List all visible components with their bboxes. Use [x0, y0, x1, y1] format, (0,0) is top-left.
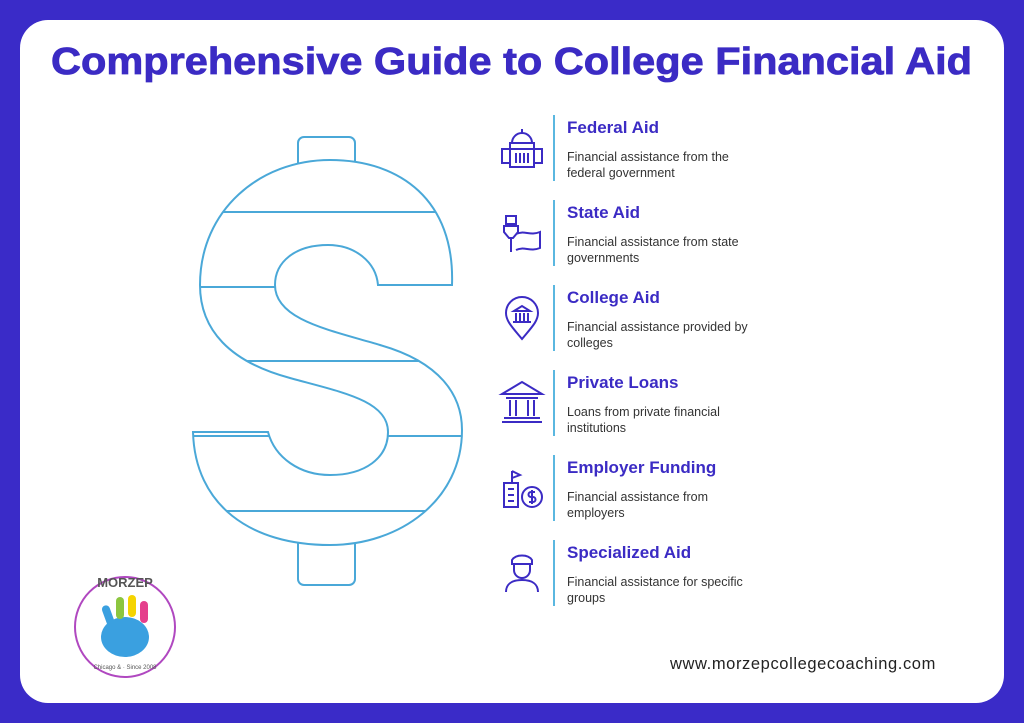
website: www.morzepcollegecoaching.com	[670, 655, 936, 673]
logo	[74, 575, 176, 678]
item: private loans: Loans from private financial institutions	[567, 405, 720, 435]
logo: Chicago & · Since 2008	[93, 665, 157, 671]
item: state aid: State Aid	[567, 203, 640, 222]
icon: building coin	[503, 470, 543, 508]
item: college aid	[505, 285, 748, 351]
icon: capitol	[501, 129, 543, 168]
item: state aid	[503, 200, 739, 266]
item: private loans: Private Loans	[567, 373, 678, 392]
item: employer funding: Employer Funding	[567, 458, 716, 477]
icon: pin bank	[505, 296, 539, 340]
item: state aid: Financial assistance from state governments	[567, 235, 739, 265]
dollar sign	[192, 136, 463, 586]
item: college aid: Financial assistance provided by colleges	[567, 320, 748, 350]
item: employer funding	[503, 455, 716, 521]
item: specialized aid: Specialized Aid	[567, 543, 691, 562]
icon: hand flag	[503, 215, 541, 252]
icon: officer	[505, 554, 539, 592]
item: specialized aid	[505, 540, 743, 606]
item: federal aid	[501, 115, 729, 181]
logo: MORZEP	[97, 575, 153, 590]
icon: bank	[498, 380, 546, 423]
item: employer funding: Financial assistance from employers	[567, 490, 708, 520]
item: private loans	[498, 370, 720, 436]
title: Comprehensive Guide to College Financial Aid	[51, 41, 972, 83]
item: federal aid: Financial assistance from the federal government	[567, 150, 729, 180]
item: federal aid: Federal Aid	[567, 118, 659, 137]
item: specialized aid: Financial assistance for specific groups	[567, 575, 743, 605]
item: college aid: College Aid	[567, 288, 660, 307]
